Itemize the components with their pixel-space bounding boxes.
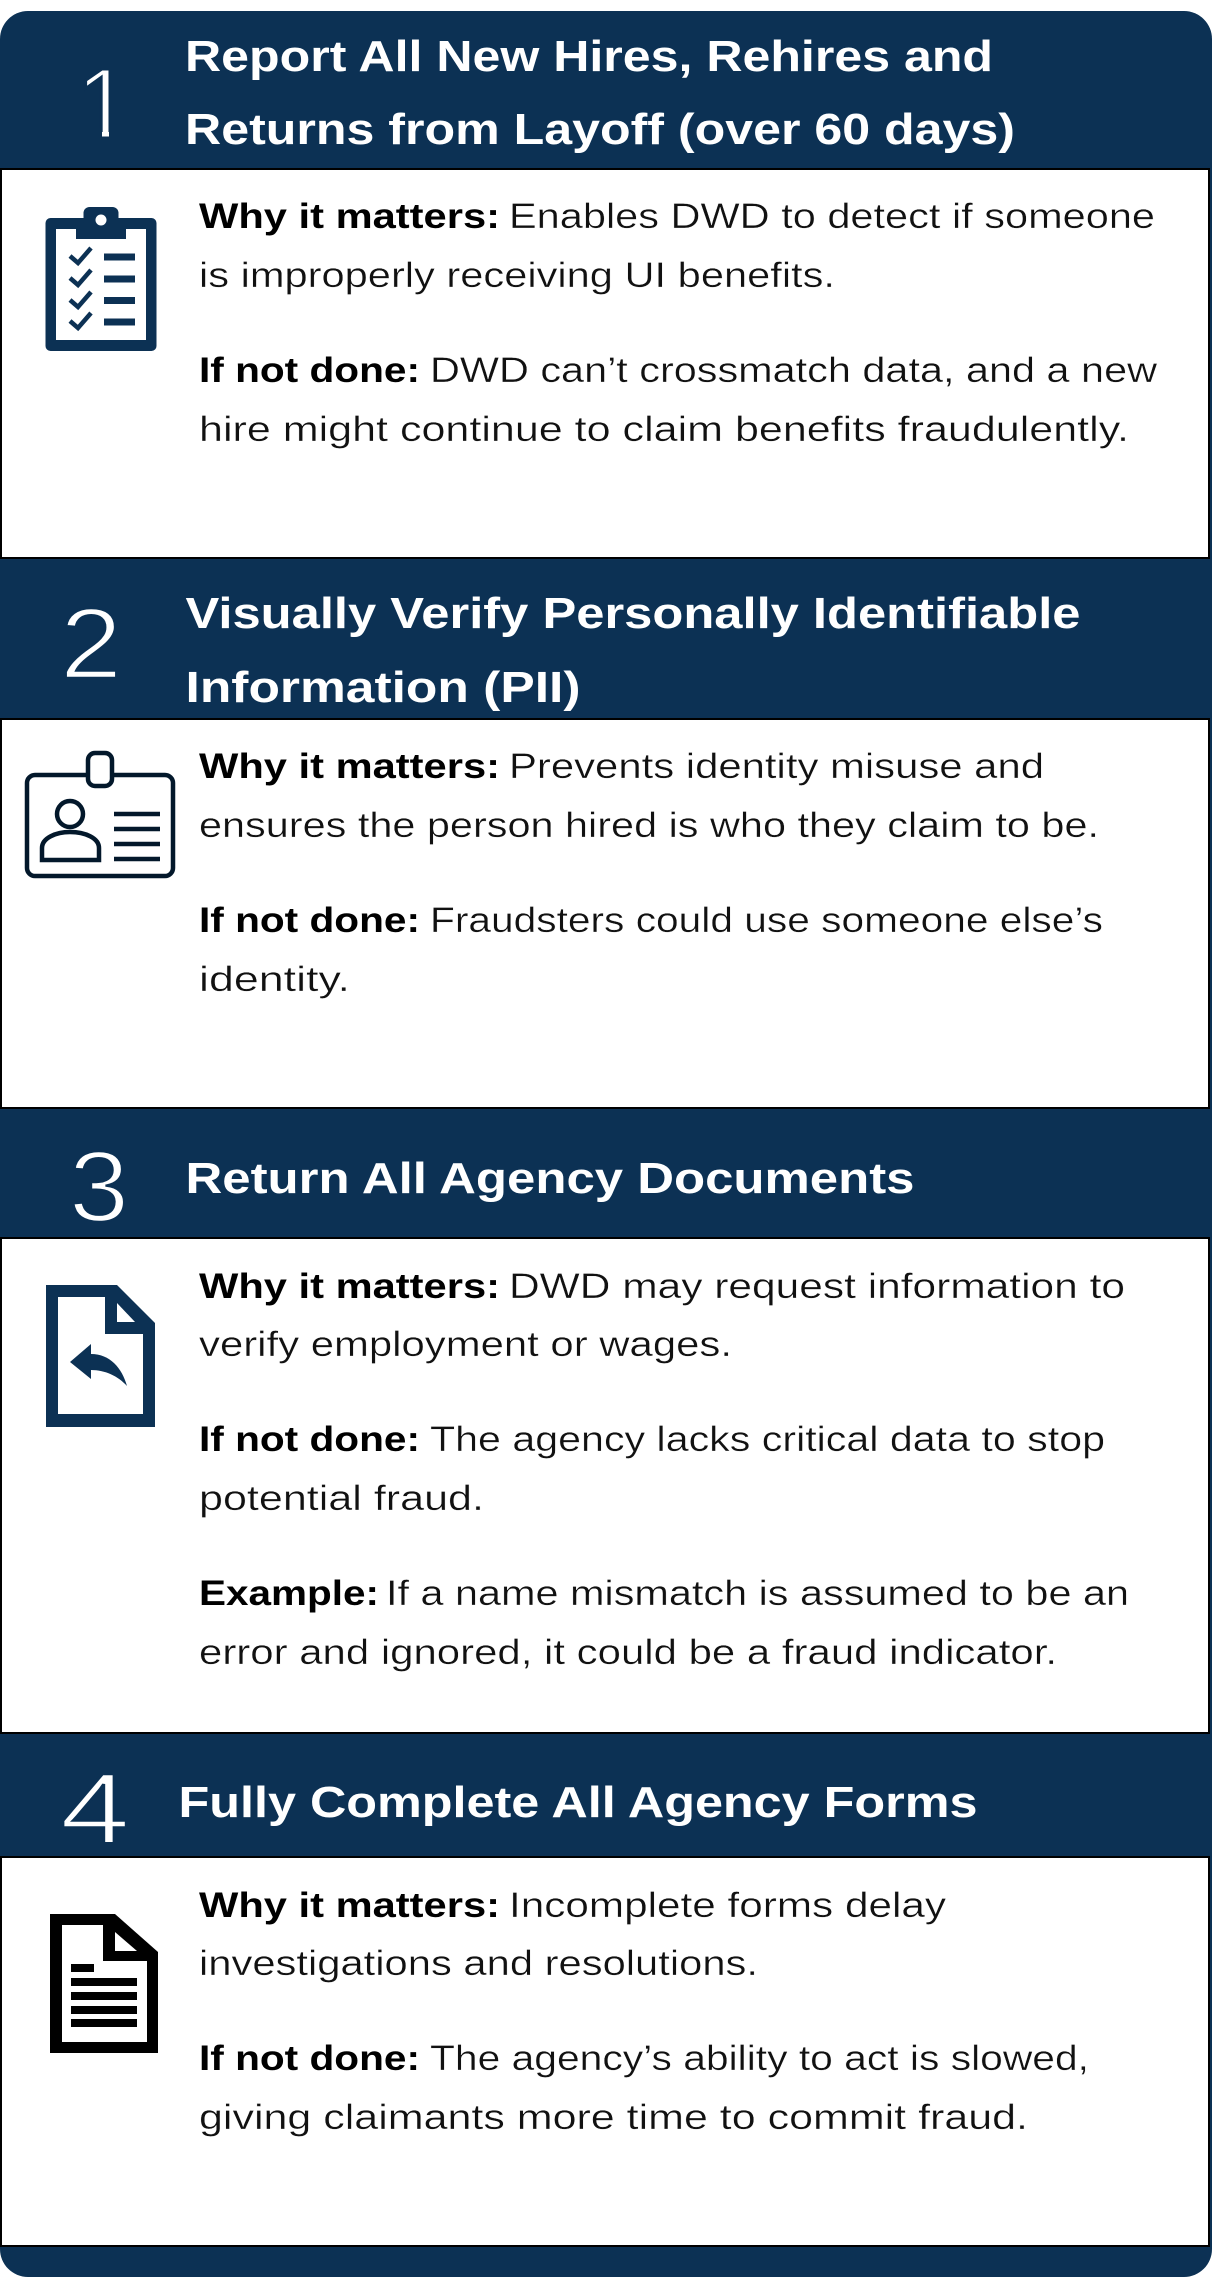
- icon: text document: [50, 1914, 158, 2053]
- step 2 heading: [186, 589, 1080, 712]
- panel: step 2: [0, 588, 1210, 1109]
- step 3 why it matters: Why it matters:: [199, 1267, 500, 1306]
- step 2 heading: Visually Verify Personally Identifiable: [186, 589, 1080, 638]
- step 4 if not done: If not done:: [199, 2039, 420, 2078]
- step 1 why it matters: [199, 197, 1155, 295]
- step 2 if not done: identity.: [199, 960, 350, 999]
- step 1 body panel: [0, 168, 1210, 559]
- step 3 if not done: If not done:: [199, 1420, 420, 1459]
- step 3 example: error and ignored, it could be a fraud indicator.: [199, 1633, 1057, 1672]
- step 2 why it matters: Why it matters:: [199, 747, 500, 786]
- step 4 if not done: The agency’s ability to act is slowed,: [430, 2039, 1089, 2078]
- step 3 if not done: The agency lacks critical data to stop: [430, 1420, 1105, 1459]
- step 1 heading: [185, 32, 1015, 154]
- step 3 why it matters: DWD may request information to: [509, 1267, 1125, 1306]
- step 1 number: 1: [76, 48, 132, 160]
- step 3 heading: Return All Agency Documents: [186, 1154, 914, 1203]
- step 2 number: 2: [60, 588, 122, 700]
- step 2 body panel: [0, 718, 1210, 1109]
- step 1 if not done: [199, 351, 1158, 449]
- step 4 why it matters: Incomplete forms delay: [509, 1886, 947, 1925]
- step 3 if not done: [199, 1420, 1105, 1518]
- step 4 why it matters: investigations and resolutions.: [199, 1944, 758, 1983]
- step 3 why it matters: [199, 1267, 1125, 1364]
- step 1 if not done: hire might continue to claim benefits fraudulently.: [199, 410, 1129, 449]
- step 4 if not done: [199, 2039, 1089, 2137]
- step 4 why it matters: [199, 1886, 947, 1983]
- icon: clipboard checklist: [46, 207, 156, 351]
- step 2 why it matters: ensures the person hired is who they claim to be.: [199, 806, 1099, 845]
- step 2 if not done: Fraudsters could use someone else’s: [430, 901, 1103, 940]
- icon: document with return arrow: [46, 1285, 155, 1427]
- step 3 number: 3: [69, 1131, 129, 1243]
- panel: step 1: [0, 32, 1210, 559]
- step 4 heading: Fully Complete All Agency Forms: [178, 1778, 978, 1827]
- icon: ID badge: [27, 753, 173, 876]
- step 2 why it matters: Prevents identity misuse and: [509, 747, 1044, 786]
- step 1 why it matters: Enables DWD to detect if someone: [509, 197, 1155, 236]
- step 3 if not done: potential fraud.: [199, 1479, 484, 1518]
- step 1 why it matters: is improperly receiving UI benefits.: [199, 256, 835, 295]
- step 1 if not done: DWD can’t crossmatch data, and a new: [430, 351, 1158, 390]
- step 3 why it matters: verify employment or wages.: [199, 1325, 732, 1364]
- step 2 if not done: [199, 901, 1103, 999]
- step 4 number: 4: [60, 1753, 130, 1865]
- step 1 if not done: If not done:: [199, 351, 420, 390]
- panel: step 4: [0, 1753, 1210, 2247]
- step 2 if not done: If not done:: [199, 901, 420, 940]
- step 3 example: [199, 1574, 1129, 1672]
- step 4 body panel: [0, 1856, 1210, 2247]
- step 1 why it matters: Why it matters:: [199, 197, 500, 236]
- step 3 body panel: [0, 1237, 1210, 1734]
- step 3 example: If a name mismatch is assumed to be an: [386, 1574, 1129, 1613]
- step 1 heading: Report All New Hires, Rehires and: [185, 32, 993, 81]
- step 4 if not done: giving claimants more time to commit fraud.: [199, 2098, 1028, 2137]
- panel: step 3: [0, 1131, 1210, 1734]
- step 3 example: Example:: [199, 1574, 379, 1613]
- step 4 why it matters: Why it matters:: [199, 1886, 500, 1925]
- step 2 heading: Information (PII): [186, 663, 580, 712]
- step 1 heading: Returns from Layoff (over 60 days): [185, 105, 1015, 154]
- step 2 why it matters: [199, 747, 1099, 845]
